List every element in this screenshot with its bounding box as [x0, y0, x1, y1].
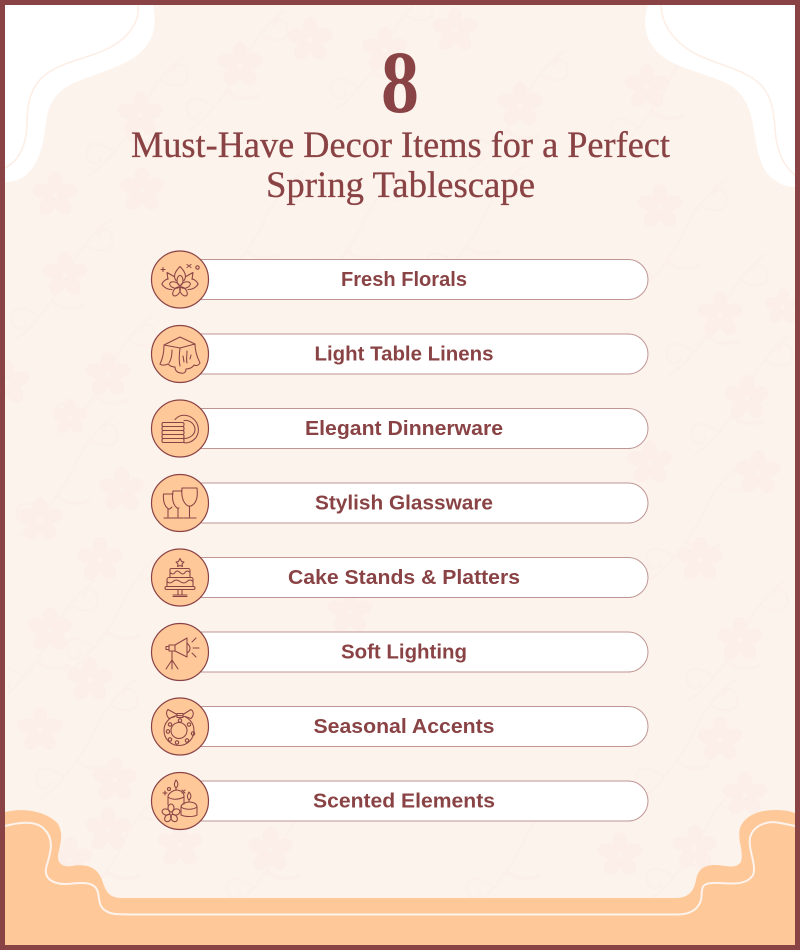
heading line 2: Spring Tablescape	[266, 165, 535, 206]
pill	[180, 632, 648, 672]
item 4: Stylish Glassware	[152, 474, 648, 532]
title	[131, 34, 671, 206]
label: Soft Lighting	[341, 642, 467, 664]
heading line 1: Must-Have Decor Items for a Perfect	[131, 125, 671, 166]
icon: plate stack	[152, 400, 208, 457]
icon: lotus flower	[152, 251, 208, 308]
pill	[180, 706, 648, 746]
pill	[180, 558, 648, 598]
label: Fresh Florals	[341, 269, 467, 291]
item 7: Seasonal Accents	[152, 698, 648, 755]
label: Scented Elements	[313, 790, 495, 812]
item 1: Fresh Florals	[152, 251, 648, 308]
item 6: Soft Lighting	[152, 624, 648, 680]
item 2: Light Table Linens	[152, 326, 648, 382]
icon: wine glasses	[152, 474, 208, 532]
label: Cake Stands & Platters	[288, 567, 520, 589]
item 5: Cake Stands & Platters	[152, 549, 648, 606]
label: Elegant Dinnerware	[305, 418, 503, 440]
icon: scented candles	[152, 772, 208, 830]
pill	[180, 260, 648, 300]
label: Light Table Linens	[314, 344, 494, 366]
bottom wave band	[5, 810, 795, 945]
top-left white corner	[5, 5, 155, 182]
item 8: Scented Elements	[152, 772, 648, 830]
icon: cake stand	[152, 549, 208, 606]
pill	[180, 781, 648, 821]
number 8: 8	[381, 34, 419, 132]
icon: studio light	[152, 624, 208, 680]
icon: tablecloth	[152, 326, 208, 382]
pill	[180, 483, 648, 523]
top-right white corner	[645, 5, 795, 187]
icon: wreath	[152, 698, 208, 755]
item 3: Elegant Dinnerware	[152, 400, 648, 457]
label: Seasonal Accents	[314, 716, 494, 738]
label: Stylish Glassware	[315, 492, 493, 514]
pill	[180, 334, 648, 374]
pill	[180, 408, 648, 448]
